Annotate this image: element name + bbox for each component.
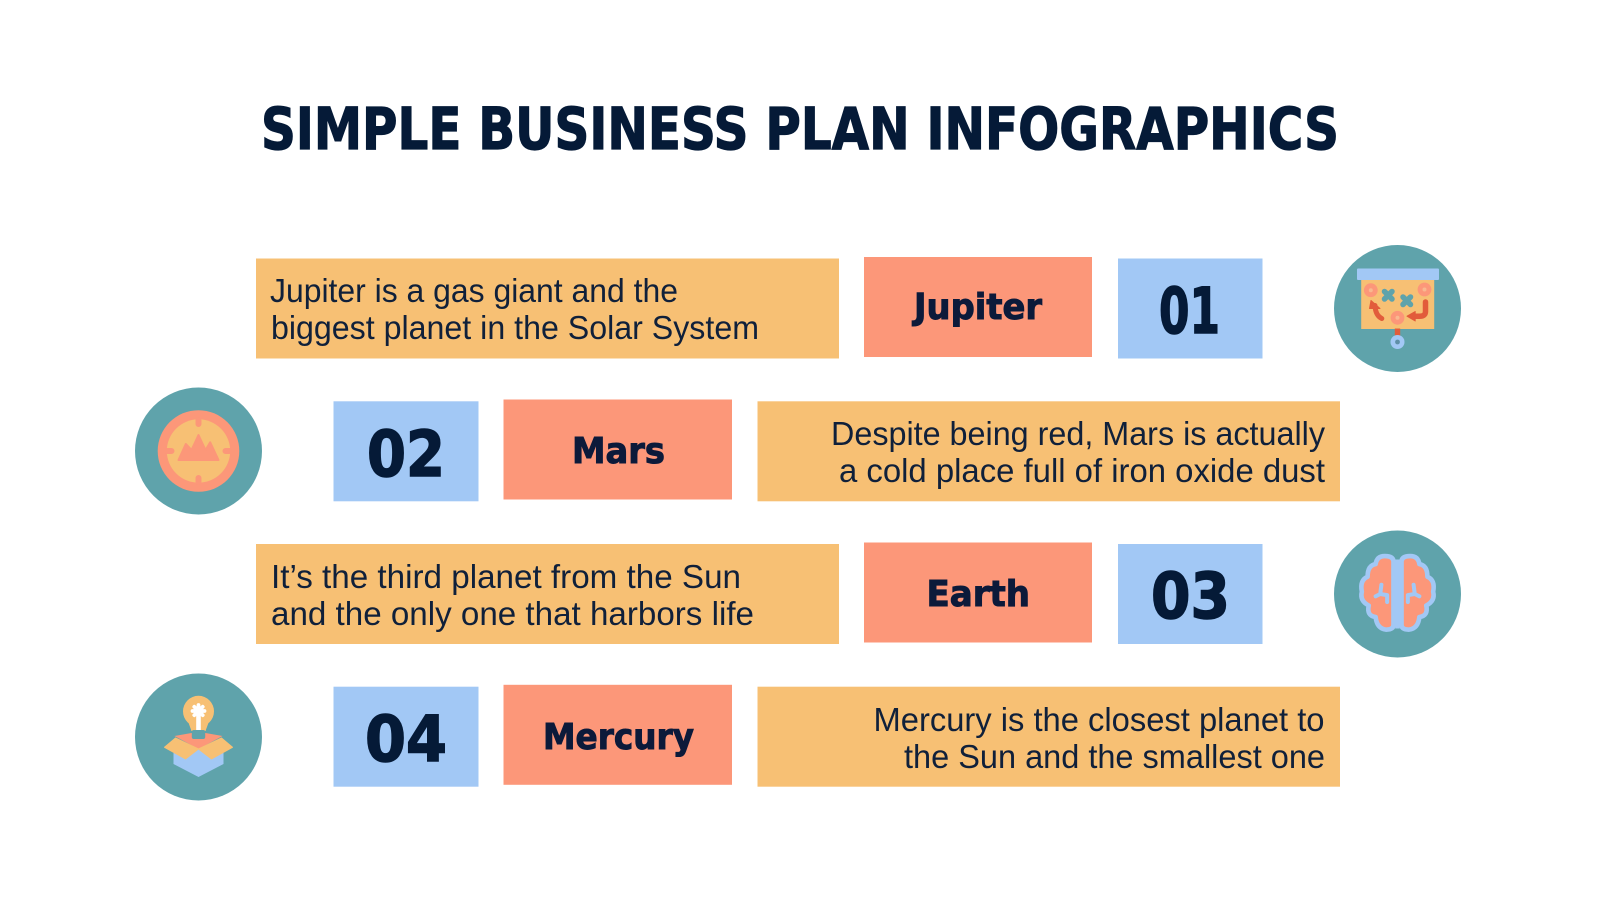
text panel: Mercury description: the Sun and the smallest one — [904, 738, 1325, 775]
icon: compass with mountains — [135, 388, 262, 514]
number panel: 02 — [334, 401, 478, 501]
number panel: 03 — [1118, 544, 1262, 644]
text panel: Earth description: and the only one that harbors life — [271, 595, 754, 632]
number panel: 02: 02 — [367, 418, 445, 491]
text panel: Mercury description: Mercury is the closest planet to — [874, 701, 1324, 738]
name panel: Jupiter: Jupiter — [911, 287, 1042, 328]
text panel: Mars description: a cold place full of iron oxide dust — [839, 452, 1325, 489]
number panel: 03: 03 — [1151, 560, 1230, 633]
number panel: 04 — [334, 687, 478, 787]
row 03: Earth — [256, 530, 1461, 658]
number panel: 01: 01 — [1159, 275, 1220, 348]
text panel: Mercury description — [758, 687, 1340, 787]
name panel: Mercury: Mercury — [543, 717, 694, 758]
icon: brain — [1334, 530, 1461, 658]
number panel: 04: 04 — [365, 703, 447, 776]
row 02: Mars — [135, 388, 1340, 514]
name panel: Mars — [504, 400, 732, 500]
text panel: Jupiter description: Jupiter is a gas giant and the — [270, 272, 678, 309]
row 04: Mercury — [135, 674, 1340, 800]
text panel: Earth description — [256, 544, 839, 644]
number panel: 01 — [1118, 258, 1262, 358]
icon: light bulb in box — [135, 674, 262, 800]
text panel: Jupiter description: biggest planet in the Solar System — [271, 309, 759, 346]
text panel: Mars description — [758, 401, 1340, 501]
name panel: Mercury — [504, 685, 732, 785]
row 01: Jupiter — [256, 245, 1461, 372]
title: SIMPLE BUSINESS PLAN INFOGRAPHICS — [261, 95, 1339, 163]
text panel: Earth description: It’s the third planet from the Sun — [271, 558, 741, 595]
name panel: Mars: Mars — [572, 431, 665, 472]
name panel: Earth: Earth — [926, 574, 1030, 615]
name panel: Jupiter — [864, 257, 1092, 357]
icon: strategy board — [1334, 245, 1461, 372]
name panel: Earth — [864, 542, 1092, 642]
text panel: Mars description: Despite being red, Mars is actually — [831, 415, 1325, 452]
text panel: Jupiter description — [256, 258, 839, 358]
